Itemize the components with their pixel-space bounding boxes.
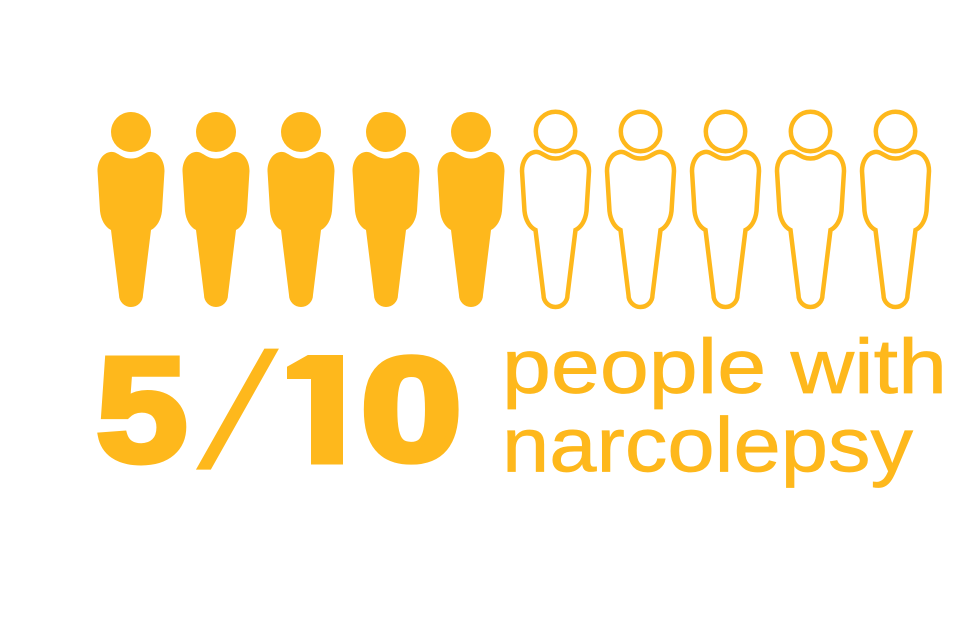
pictogram row: ten people — [98, 112, 929, 307]
statistic: 5/10: 5 — [96, 327, 188, 493]
label: people with narcolepsy — [502, 324, 947, 488]
icon: outlined person 10 — [862, 112, 929, 307]
label: people with narcolepsy: narcolepsy — [502, 402, 914, 488]
icon: outlined person 8 — [692, 112, 759, 307]
icon: outlined person 7 — [607, 112, 674, 307]
statistic: 5/10 — [97, 348, 459, 470]
icon: filled person 2 — [182, 112, 250, 307]
statistic: 5/10: 1 — [275, 324, 372, 494]
statistic: 5/10: / — [188, 321, 286, 502]
icon: filled person 3 — [268, 112, 334, 307]
icon: filled person 4 — [352, 112, 420, 307]
label: people with narcolepsy: people with — [502, 324, 947, 410]
icon: outlined person 6 — [522, 112, 589, 307]
icon: filled person 5 — [438, 112, 504, 307]
icon: filled person 1 — [98, 112, 164, 307]
icon: outlined person 9 — [777, 112, 844, 307]
statistic: 5/10: 0 — [361, 327, 462, 491]
